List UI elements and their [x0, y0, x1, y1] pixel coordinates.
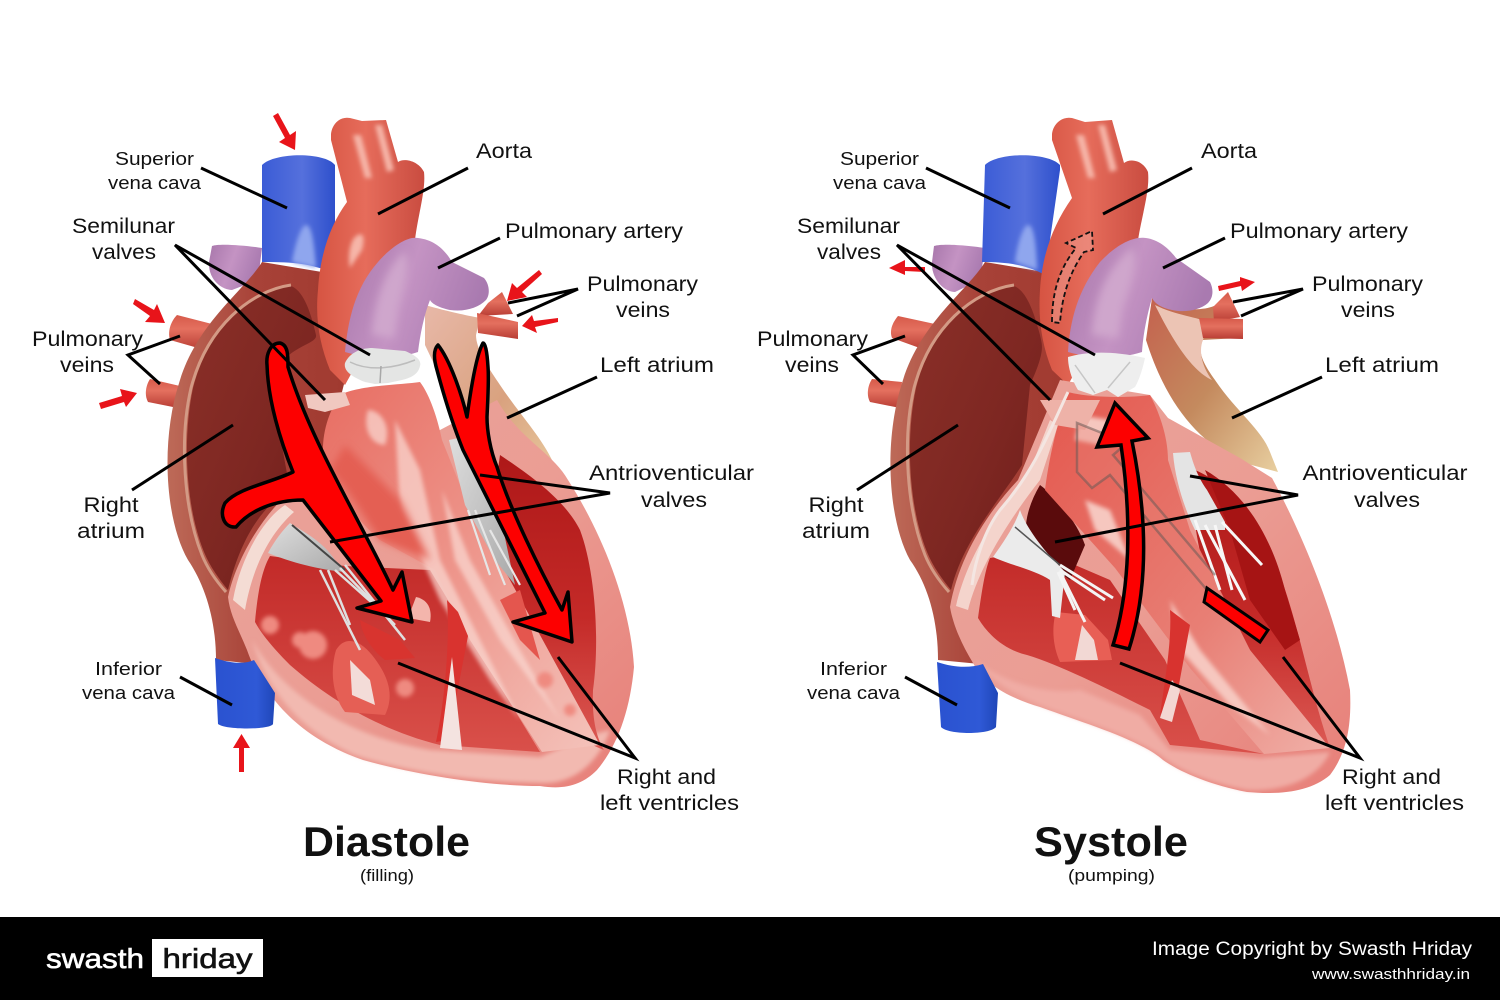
left pulmonary artery stub: [932, 245, 985, 292]
small red arrows: systole: [889, 260, 1255, 291]
right ventricle cavity: [978, 550, 1264, 754]
aorta highlights: [1076, 125, 1117, 178]
ventricle lower lighter wall: [975, 660, 1330, 790]
arrow into right pulmonary vein lower: [522, 315, 558, 333]
label: aorta: Aorta: [1201, 140, 1257, 163]
heading: diastole: Diastole: [303, 818, 470, 865]
septum streaks: [1075, 415, 1270, 735]
heading: systole: Systole: [1034, 818, 1188, 865]
atrioventricular valve left side: [1173, 452, 1262, 600]
label: atrioventricular valves: Antrioventicular: [589, 462, 754, 485]
label: right atrium: [802, 494, 870, 543]
interventricular septum: [323, 382, 600, 752]
right atrium rim: [184, 285, 291, 592]
labels: diastole: [32, 140, 754, 815]
label: inferior vena cava: Inferior: [820, 658, 887, 679]
papillary muscles: [333, 590, 540, 750]
arrow: systole main red arrow: [1097, 403, 1148, 649]
label: right pulmonary veins: Pulmonary: [587, 273, 699, 296]
arrow into superior vena cava: [273, 113, 296, 150]
label: superior vena cava: vena cava: [108, 172, 202, 193]
label: semilunar valves: [797, 215, 900, 264]
label: semilunar valves: [72, 215, 175, 264]
copyright text: Image Copyright by Swasth Hriday: [1152, 939, 1473, 960]
label: right and left ventricles: Right and: [1342, 766, 1441, 789]
inner wall membranes: [956, 420, 1058, 610]
superior vena cava: [262, 155, 335, 274]
semilunar valve small: [305, 392, 350, 412]
left ventricle cavity: [490, 455, 604, 750]
label: right atrium: atrium: [802, 520, 870, 543]
atrioventricular valve right side: [268, 523, 405, 650]
semilunar valve white cusps: [345, 348, 420, 384]
label: left pulmonary veins: Pulmonary: [32, 328, 144, 351]
pulmonary artery highlight: [1092, 248, 1135, 338]
label: pulmonary artery: Pulmonary artery: [1230, 220, 1409, 243]
label: atrioventricular valves: [1302, 462, 1468, 512]
heading: systole: (pumping): [1068, 866, 1155, 885]
label: semilunar valves: valves: [817, 241, 881, 264]
label: right and left ventricles: [1325, 766, 1464, 815]
heart illustration: systole: [868, 118, 1350, 793]
label: left pulmonary veins: Pulmonary: [757, 328, 869, 351]
label: right atrium: Right: [808, 494, 864, 517]
right atrium chamber: [187, 286, 316, 590]
label: left pulmonary veins: [32, 328, 144, 377]
label: inferior vena cava: [807, 658, 901, 703]
papillary muscles: [1053, 610, 1190, 722]
pulmonary artery highlight: [372, 252, 408, 338]
logo: swasth hriday: swasth: [46, 943, 144, 974]
ventricle wall: [228, 400, 634, 787]
label: pulmonary artery: Pulmonary artery: [505, 220, 684, 243]
small red arrows: diastole: [99, 113, 558, 772]
label: superior vena cava: [833, 148, 927, 193]
label: inferior vena cava: Inferior: [95, 658, 162, 679]
label: superior vena cava: Superior: [840, 148, 919, 169]
label: atrioventricular valves: Antrioventicular: [1302, 462, 1468, 485]
label: atrioventricular valves: valves: [641, 489, 707, 512]
semilunar valve white cusps: [1068, 353, 1145, 397]
label: right and left ventricles: [600, 766, 739, 815]
dark hole below valve: [1026, 485, 1085, 580]
label: aorta: Aorta: [476, 140, 532, 163]
aorta: [1040, 118, 1148, 385]
superior vena cava highlight: [1015, 225, 1037, 270]
arrow: systole red arrow tail: [1204, 588, 1268, 642]
label: atrioventricular valves: valves: [1354, 489, 1420, 512]
label: right pulmonary veins: veins: [616, 299, 670, 322]
arrow into right pulmonary vein upper: [507, 270, 542, 301]
labels: systole: [757, 140, 1468, 815]
left ventricle cavity: [1193, 470, 1330, 748]
inferior vena cava: [937, 662, 998, 733]
left atrium flap: [1146, 298, 1278, 472]
logo: swasth hriday: hriday: [162, 943, 252, 974]
atrioventricular valve right side: [993, 510, 1113, 622]
left atrium pale area: [1155, 305, 1212, 380]
label: right pulmonary veins: veins: [1341, 299, 1395, 322]
label: superior vena cava: [108, 148, 202, 193]
label: right pulmonary veins: Pulmonary: [1312, 273, 1424, 296]
white chord on septum border: [972, 392, 1068, 585]
dark red strip in left ventricle: [1205, 470, 1300, 650]
label: right atrium: Right: [84, 494, 139, 517]
label: right and left ventricles: left ventricles: [1325, 792, 1464, 815]
label: right and left ventricles: left ventricles: [600, 792, 739, 815]
pulmonary artery trunk: [1068, 238, 1212, 357]
arrow out of pulmonary artery left: [889, 260, 925, 275]
left pulmonary veins: [146, 315, 212, 408]
label: left pulmonary veins: [757, 328, 869, 377]
right atrium chamber: [910, 286, 1042, 590]
footer bar: [0, 917, 1500, 1000]
arrow: systole dashed arrow in aorta: [1052, 231, 1093, 323]
label: semilunar valves: Semilunar: [72, 215, 175, 238]
pulmonary artery trunk: [345, 238, 489, 357]
label: right and left ventricles: Right and: [617, 766, 716, 789]
ventricle lower lighter wall: [252, 640, 610, 783]
inner wall highlight: [233, 505, 294, 610]
label: left atrium: Left atrium: [600, 354, 714, 377]
arrow: diastole blood flow into right ventricle: [222, 343, 412, 622]
arrow: systole ghost outline from left ventricle: [1077, 423, 1215, 590]
inferior vena cava: [215, 658, 275, 728]
aorta highlights: [349, 125, 394, 268]
logo: swasth hriday: [46, 939, 263, 977]
arrow out of pulmonary artery right: [1218, 277, 1255, 291]
right atrium rim: [907, 285, 1014, 592]
right atrium outer: [168, 262, 345, 664]
website: www.swasthhriday.in: [1311, 966, 1470, 983]
label: superior vena cava: Superior: [115, 148, 194, 169]
label: left atrium: Left atrium: [1325, 354, 1439, 377]
left pulmonary artery stub: [209, 245, 262, 290]
heart illustration: diastole: [146, 118, 634, 787]
label: superior vena cava: vena cava: [833, 172, 927, 193]
superior vena cava highlight: [292, 225, 316, 268]
label: right pulmonary veins: [587, 273, 699, 322]
leader lines: diastole: [128, 168, 635, 758]
cavity blobs: [261, 616, 576, 716]
arrow: diastole blood flow into left ventricle: [434, 343, 572, 642]
label: right pulmonary veins: [1312, 273, 1424, 322]
heading: diastole: (filling): [360, 866, 414, 885]
label: left pulmonary veins: veins: [60, 354, 114, 377]
label: inferior vena cava: vena cava: [82, 682, 176, 703]
label: right atrium: [77, 494, 145, 543]
right ventricle cavity: [255, 556, 540, 752]
arrow into left pulmonary vein upper: [133, 299, 165, 323]
heading: systole: [1034, 818, 1188, 885]
atrioventricular valve left side: [449, 436, 520, 585]
right atrium outer: [890, 262, 1068, 664]
ventricle wall: [950, 380, 1350, 793]
arrow into left pulmonary vein lower: [99, 389, 137, 409]
heading: diastole: [303, 818, 470, 885]
aorta: [317, 118, 424, 385]
arrow into inferior vena cava: [233, 734, 250, 772]
leader lines: systole: [853, 168, 1360, 758]
label: semilunar valves: Semilunar: [797, 215, 900, 238]
left pulmonary veins: [868, 316, 935, 408]
left atrium and pulmonary veins: [425, 292, 553, 462]
small semilunar patch: [1040, 400, 1100, 430]
label: atrioventricular valves: [589, 462, 754, 512]
label: inferior vena cava: vena cava: [807, 682, 901, 703]
label: left pulmonary veins: veins: [785, 354, 839, 377]
label: semilunar valves: valves: [92, 241, 156, 264]
right pulmonary veins: [1199, 292, 1243, 339]
label: inferior vena cava: [82, 658, 176, 703]
septum streaks: [366, 410, 560, 720]
interventricular septum: [1045, 392, 1330, 754]
label: right atrium: atrium: [77, 520, 145, 543]
upper septum red shade: [330, 445, 430, 560]
superior vena cava: [982, 155, 1060, 275]
